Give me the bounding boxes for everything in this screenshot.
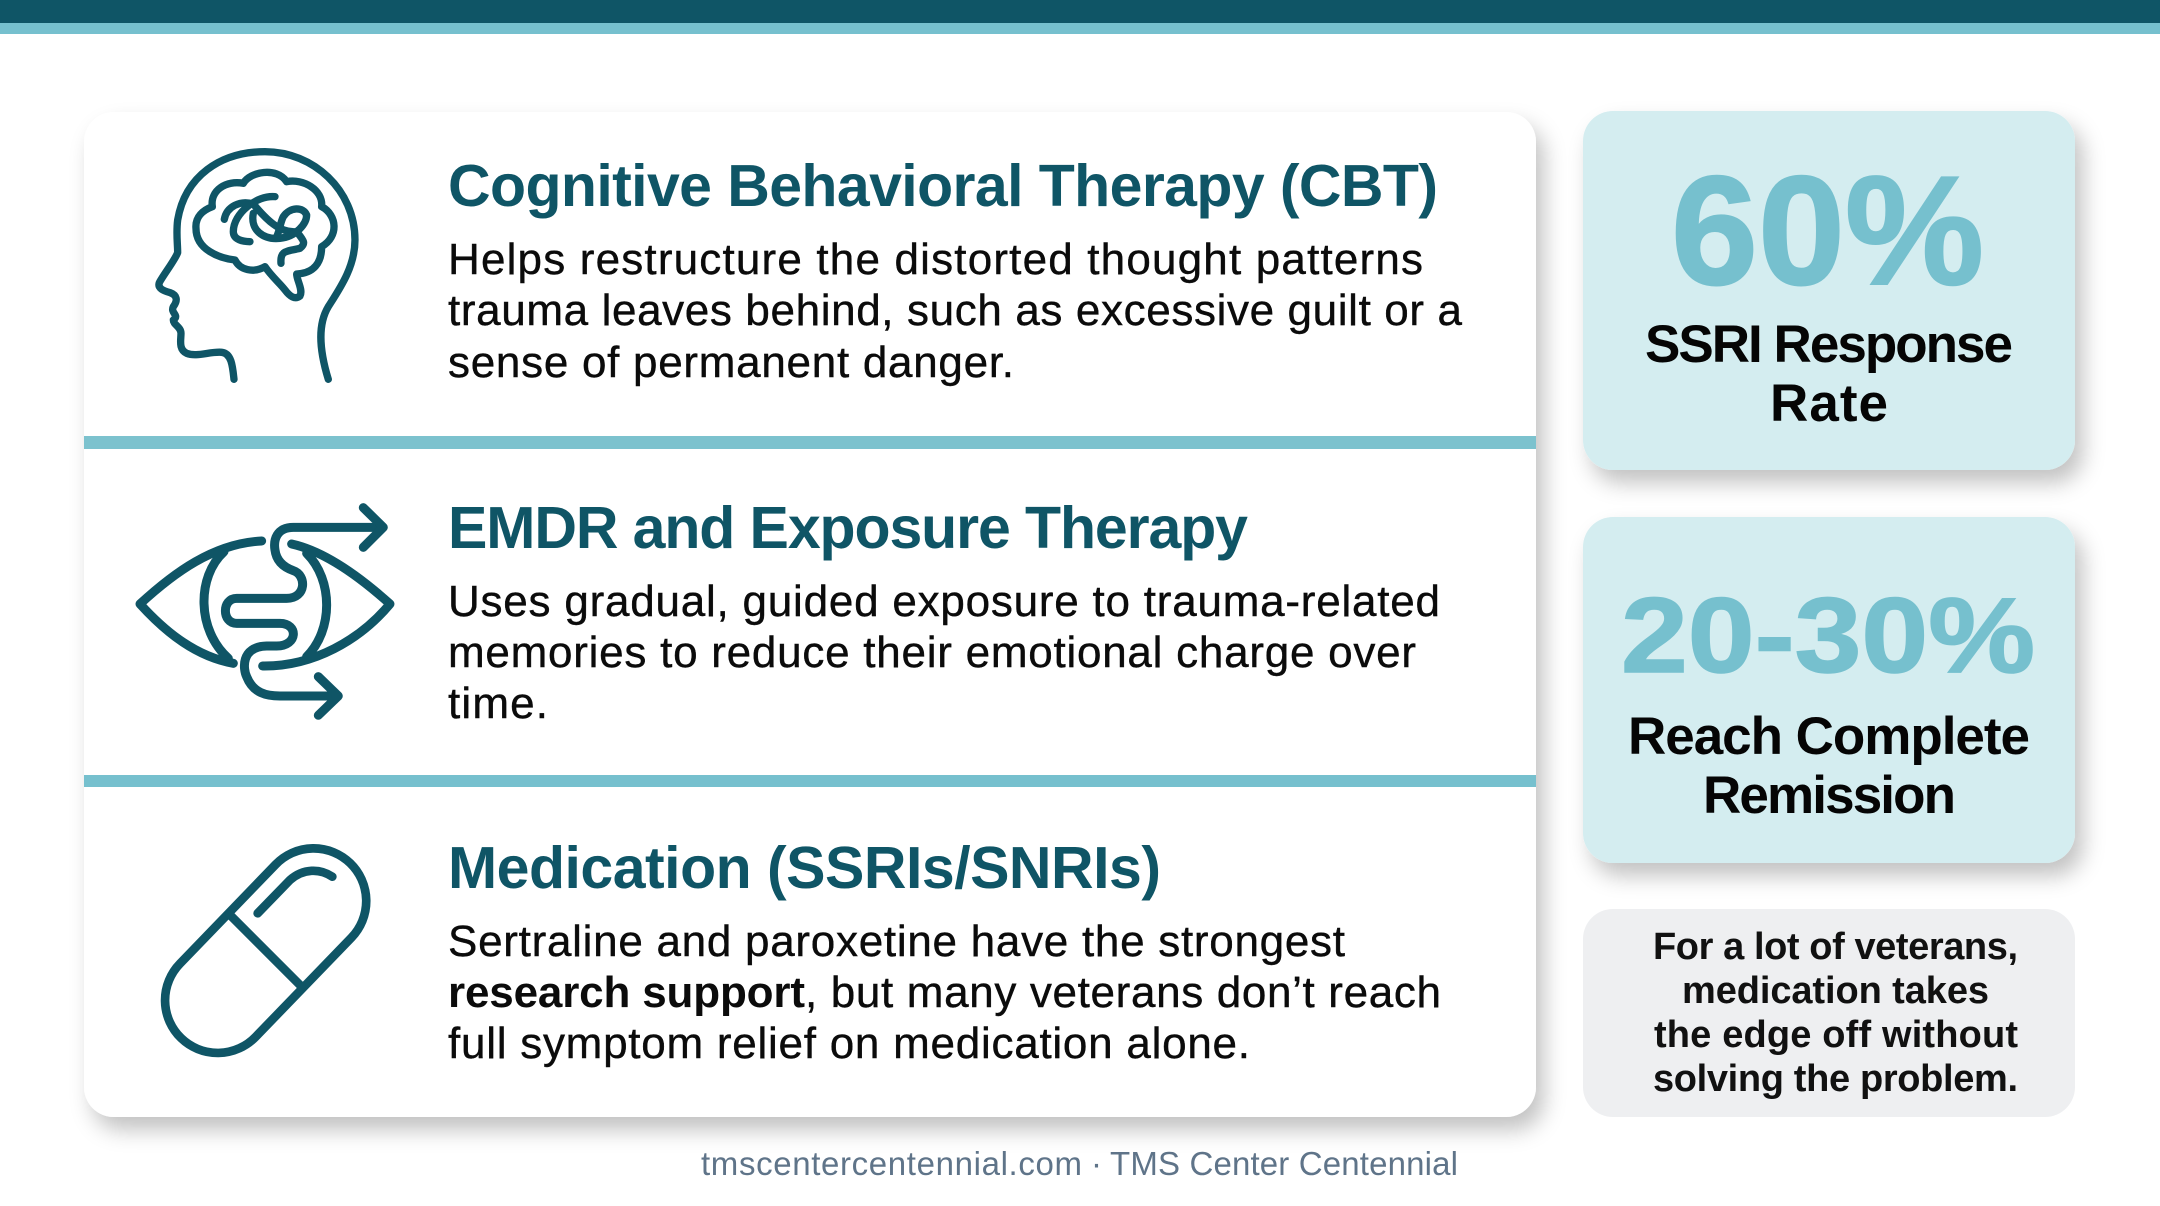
- text: Medication description: research support: [448, 968, 805, 1017]
- text: Medication description: full symptom relief on medication alone.: [448, 1019, 1250, 1068]
- stat: 20-30%: 20-30%: [1621, 575, 2035, 695]
- text: EMDR description: time.: [448, 679, 548, 728]
- text: Medication description: Sertraline and paroxetine have the strongest: [448, 917, 1345, 966]
- icon: head with tangled brain: [159, 152, 355, 379]
- text: Medication description: , but many veterans don’t reach: [805, 968, 1441, 1017]
- text: EMDR description: [448, 577, 1440, 728]
- text: CBT description: Helps restructure the distorted thought patterns: [448, 235, 1423, 284]
- label: Reach Complete Remission: [1628, 707, 2030, 825]
- text: CBT description: trauma leaves behind, such as excessive guilt or a: [448, 286, 1463, 335]
- label: Reach Complete Remission: Remission: [1703, 766, 1956, 825]
- callout: veterans note: medication takes: [1682, 970, 1989, 1012]
- icon: eye with winding arrows: [140, 508, 390, 715]
- label: SSRI Response Rate: [1645, 315, 2013, 433]
- footer source: ·: [1091, 1145, 1102, 1182]
- callout: veterans note: the edge off without: [1654, 1014, 2018, 1056]
- footer source: tmscentercentennial.com: [701, 1145, 1082, 1182]
- text: CBT description: sense of permanent danger.: [448, 338, 1014, 387]
- panel: remission stat: [1583, 517, 2075, 863]
- panel: SSRI response stat: [1583, 111, 2075, 470]
- callout: veterans note: For a lot of veterans,: [1653, 926, 2018, 968]
- text: Medication description: [448, 917, 1441, 1068]
- callout: veterans note: [1583, 909, 2075, 1117]
- label: SSRI Response Rate: Rate: [1770, 374, 1888, 433]
- text: EMDR description: memories to reduce their emotional charge over: [448, 628, 1416, 677]
- heading: CBT: Cognitive Behavioral Therapy (CBT): [448, 153, 1438, 219]
- callout: veterans note: solving the problem.: [1653, 1058, 2018, 1100]
- footer source: TMS Center Centennial: [1110, 1145, 1458, 1182]
- label: SSRI Response Rate: SSRI Response: [1645, 315, 2013, 374]
- label: Reach Complete Remission: Reach Complete: [1628, 707, 2030, 766]
- footer source: [701, 1145, 1458, 1182]
- icon: capsule: [143, 827, 388, 1075]
- panel: treatments: [84, 112, 1536, 1117]
- top banner: [0, 0, 2160, 34]
- text: EMDR description: Uses gradual, guided exposure to trauma-related: [448, 577, 1440, 626]
- heading: Medication: Medication (SSRIs/SNRIs): [448, 835, 1161, 901]
- heading: EMDR: EMDR and Exposure Therapy: [448, 495, 1248, 561]
- stat: 60%: 60%: [1671, 144, 1984, 317]
- text: CBT description: [448, 235, 1463, 387]
